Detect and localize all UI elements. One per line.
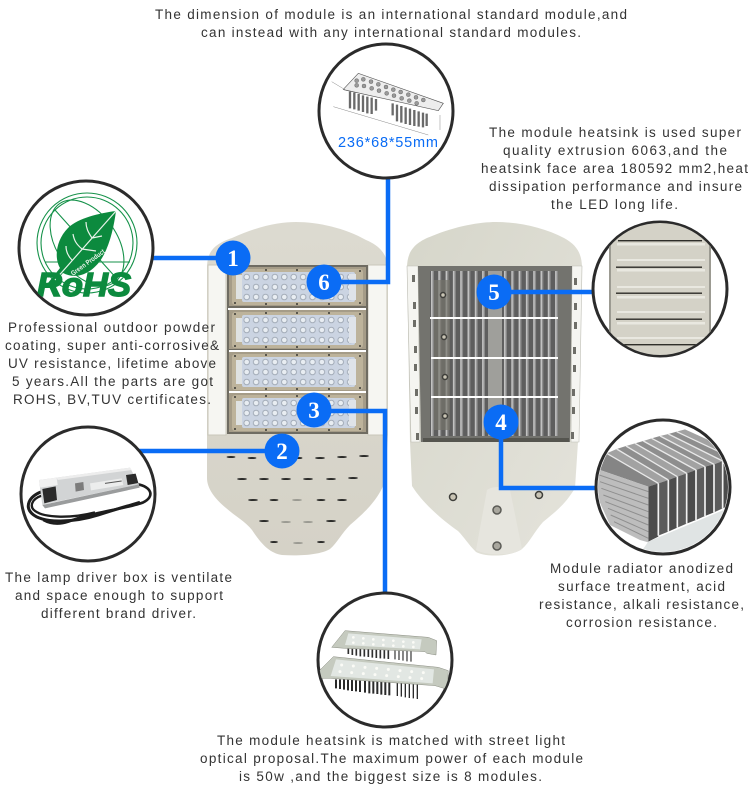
vent slots [226, 455, 369, 543]
text: radiator note: resistance, alkali resistance, [539, 597, 744, 612]
text: driver box note: The lamp driver box is ventilate [5, 570, 232, 585]
text: heatsink face note: The module heatsink is used super [489, 125, 742, 140]
mounting screws [440, 292, 542, 500]
text: heatsink face note: quality extrusion 6063,and the [503, 143, 727, 158]
driver housing [39, 468, 139, 505]
badge 1 [216, 240, 250, 276]
text: module dimension note [155, 7, 627, 40]
badge 3: 3 [308, 398, 320, 423]
side wall [595, 470, 648, 542]
dimension label: 236*68*55mm [338, 135, 438, 151]
side strips [208, 265, 226, 435]
text: powder coating note [5, 320, 219, 407]
upper module [348, 647, 411, 662]
Green Product label: Green Product [70, 248, 107, 278]
LED module row 3 [229, 352, 366, 391]
text: powder coating note: 5 years.All the parts are got [12, 374, 213, 389]
badge 5: 5 [488, 280, 500, 305]
text: heatsink face note [481, 125, 748, 212]
module window [227, 265, 368, 434]
fin channels [600, 453, 658, 487]
lamp body front [207, 222, 388, 555]
badge 6 [306, 264, 342, 300]
text: radiator note: corrosion resistance. [566, 615, 717, 630]
text: powder coating note: UV resistance, lifetime above [8, 356, 216, 371]
text: heatsink face note: the LED long life. [551, 197, 678, 212]
circle: driver box [21, 427, 155, 561]
badge 3 [296, 392, 332, 428]
badge 5 [476, 274, 512, 310]
panel: front view of street light [207, 222, 388, 555]
badge 4 [484, 404, 518, 440]
connector lines [139, 175, 598, 595]
mount bracket [476, 487, 522, 554]
LED module row 2 [229, 310, 366, 349]
module drawing [332, 73, 443, 135]
text: module power note: optical proposal.The maximum power of each module [200, 751, 583, 766]
circle: RoHS certification [19, 181, 153, 315]
text: module power note: The module heatsink is matched with street light [217, 733, 565, 748]
heat sink window [418, 266, 572, 442]
fin fronts [648, 483, 658, 542]
LED module row 4 [229, 393, 366, 432]
circle: LED modules [318, 593, 452, 727]
panel: back view of street light [407, 222, 582, 556]
text: heatsink face note: dissipation performance and insure [489, 179, 742, 194]
text: radiator note [539, 561, 744, 630]
cables [28, 492, 140, 521]
text: driver box note [5, 570, 232, 621]
text: driver box note: different brand driver. [41, 606, 196, 621]
text: driver box note: and space enough to support [15, 588, 223, 603]
badge 2 [264, 434, 300, 468]
text: heatsink face note: heatsink face area 180592 mm2,heat [481, 161, 748, 176]
badge 4: 4 [495, 410, 507, 435]
badge 1: 1 [227, 246, 239, 271]
circle: anodized radiator [595, 420, 740, 558]
text: radiator note: Module radiator anodized [550, 561, 733, 576]
lower module [336, 679, 417, 699]
LED module row 1 [229, 267, 366, 306]
text: module dimension note: The dimension of module is an international standard module,and [155, 7, 627, 22]
side strips with bolts [407, 266, 582, 442]
text: module power note [200, 733, 583, 784]
lamp body back [407, 222, 582, 556]
text: module power note: is 50w ,and the biggest size is 8 modules. [239, 769, 542, 784]
white gaps [430, 317, 558, 319]
text: powder coating note: ROHS, BV,TUV certificates. [13, 392, 211, 407]
circle: heatsink face [593, 220, 727, 358]
RoHS globe [36, 192, 138, 294]
text: module dimension note: can instead with any international standard modules. [201, 25, 581, 40]
RoHS wordmark: RoHS [37, 266, 131, 303]
badge 6: 6 [318, 270, 330, 295]
text: powder coating note: Professional outdoor powder [8, 320, 216, 335]
circle: module dimensions [319, 44, 453, 178]
text: powder coating note: coating, super anti-corrosive& [5, 338, 219, 353]
badge 2: 2 [276, 439, 288, 464]
text: radiator note: surface treatment, acid [558, 579, 725, 594]
green leaf [48, 211, 116, 286]
